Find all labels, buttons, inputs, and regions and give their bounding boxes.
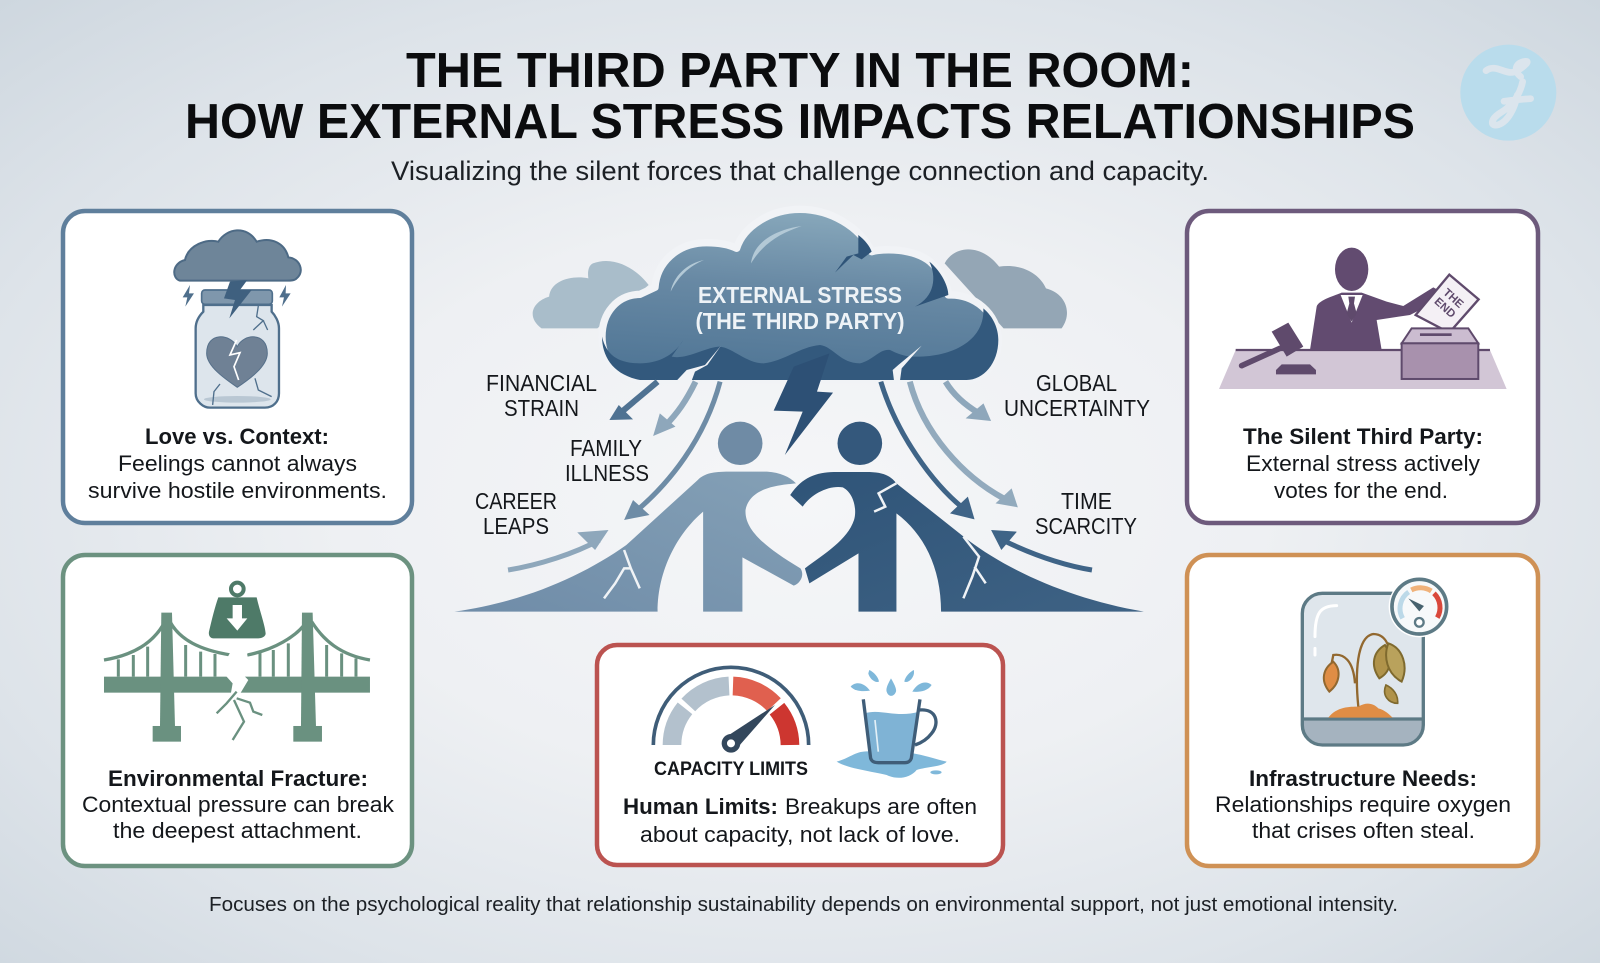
title: THE THIRD PARTY IN THE ROOM: [406, 43, 1194, 98]
panel: love vs context [63, 211, 412, 523]
icon: fractured bridge under weight [104, 583, 370, 742]
title: HOW EXTERNAL STRESS IMPACTS RELATIONSHIPS [185, 94, 1415, 149]
icon: logo badge [1460, 45, 1556, 141]
title [185, 43, 1415, 149]
icon: storm cloud over cracked jar with broken heart [174, 230, 301, 408]
card text: votes for the end. [1274, 478, 1448, 503]
label: financial strain: STRAIN [504, 395, 579, 421]
footer note: Focuses on the psychological reality that relationship sustainability depends on environmental support, not just emotional intensity. [209, 894, 1398, 916]
card text: External stress actively [1246, 451, 1481, 476]
label: time scarcity: SCARCITY [1035, 513, 1137, 539]
card text: about capacity, not lack of love. [640, 822, 960, 847]
card text [623, 794, 977, 847]
person right [790, 422, 1144, 612]
card text: Infrastructure Needs: [1249, 766, 1477, 791]
card text: the deepest attachment. [113, 818, 362, 843]
icon: capacity gauge and overflowing cup [653, 667, 947, 778]
label: time scarcity [1035, 488, 1137, 539]
label: global uncertainty: UNCERTAINTY [1004, 395, 1150, 421]
gauge caption: CAPACITY LIMITS [654, 759, 808, 780]
panel: human limits [597, 645, 1003, 865]
card text: Human Limits: [623, 794, 778, 819]
label: global uncertainty: GLOBAL [1036, 370, 1117, 396]
panel: environmental fracture [63, 555, 412, 866]
label: family illness: ILLNESS [565, 460, 649, 486]
panel: infrastructure needs [1187, 555, 1538, 866]
icon: figure voting with gavel and ballot box: THE [1441, 287, 1466, 311]
card text: Relationships require oxygen [1215, 792, 1511, 817]
card text: Breakups are often [785, 794, 977, 819]
card text: that crises often steal. [1252, 818, 1475, 843]
label: financial strain: FINANCIAL [486, 370, 597, 396]
card text [1243, 424, 1483, 503]
card text: Contextual pressure can break [82, 792, 395, 817]
icon: wilting plant in glass jar with gauge [1302, 576, 1450, 745]
label: financial strain [486, 370, 597, 421]
panel: silent third party [1187, 211, 1538, 523]
person left [454, 422, 802, 612]
card text [88, 424, 387, 503]
label: family illness [565, 435, 649, 486]
label: career leaps [475, 488, 557, 539]
cloud label [696, 282, 904, 334]
label: time scarcity: TIME [1061, 488, 1112, 514]
label: global uncertainty [1004, 370, 1150, 421]
label: family illness: FAMILY [570, 435, 642, 461]
arrows [508, 382, 1092, 570]
label: career leaps: LEAPS [483, 513, 549, 539]
card text: survive hostile environments. [88, 478, 387, 503]
card text [1215, 766, 1511, 843]
subtitle: Visualizing the silent forces that challenge connection and capacity. [391, 156, 1209, 186]
card text: Feelings cannot always [118, 451, 357, 476]
central illustration: storm over couple [454, 209, 1150, 612]
cloud label: (THE THIRD PARTY) [696, 308, 904, 334]
ground cracks [604, 483, 986, 598]
card text: The Silent Third Party: [1243, 424, 1483, 449]
label: career leaps: CAREER [475, 488, 557, 514]
card text: Environmental Fracture: [108, 766, 368, 791]
main storm cloud [602, 209, 998, 381]
card text: Love vs. Context: [145, 424, 329, 449]
background clouds [533, 249, 1067, 328]
icon: figure voting with gavel and ballot box: END [1432, 296, 1457, 321]
card text [82, 766, 395, 843]
icon: figure voting with gavel and ballot box [1219, 248, 1507, 389]
lightning bolt [774, 353, 833, 455]
cloud label: EXTERNAL STRESS [698, 282, 902, 308]
